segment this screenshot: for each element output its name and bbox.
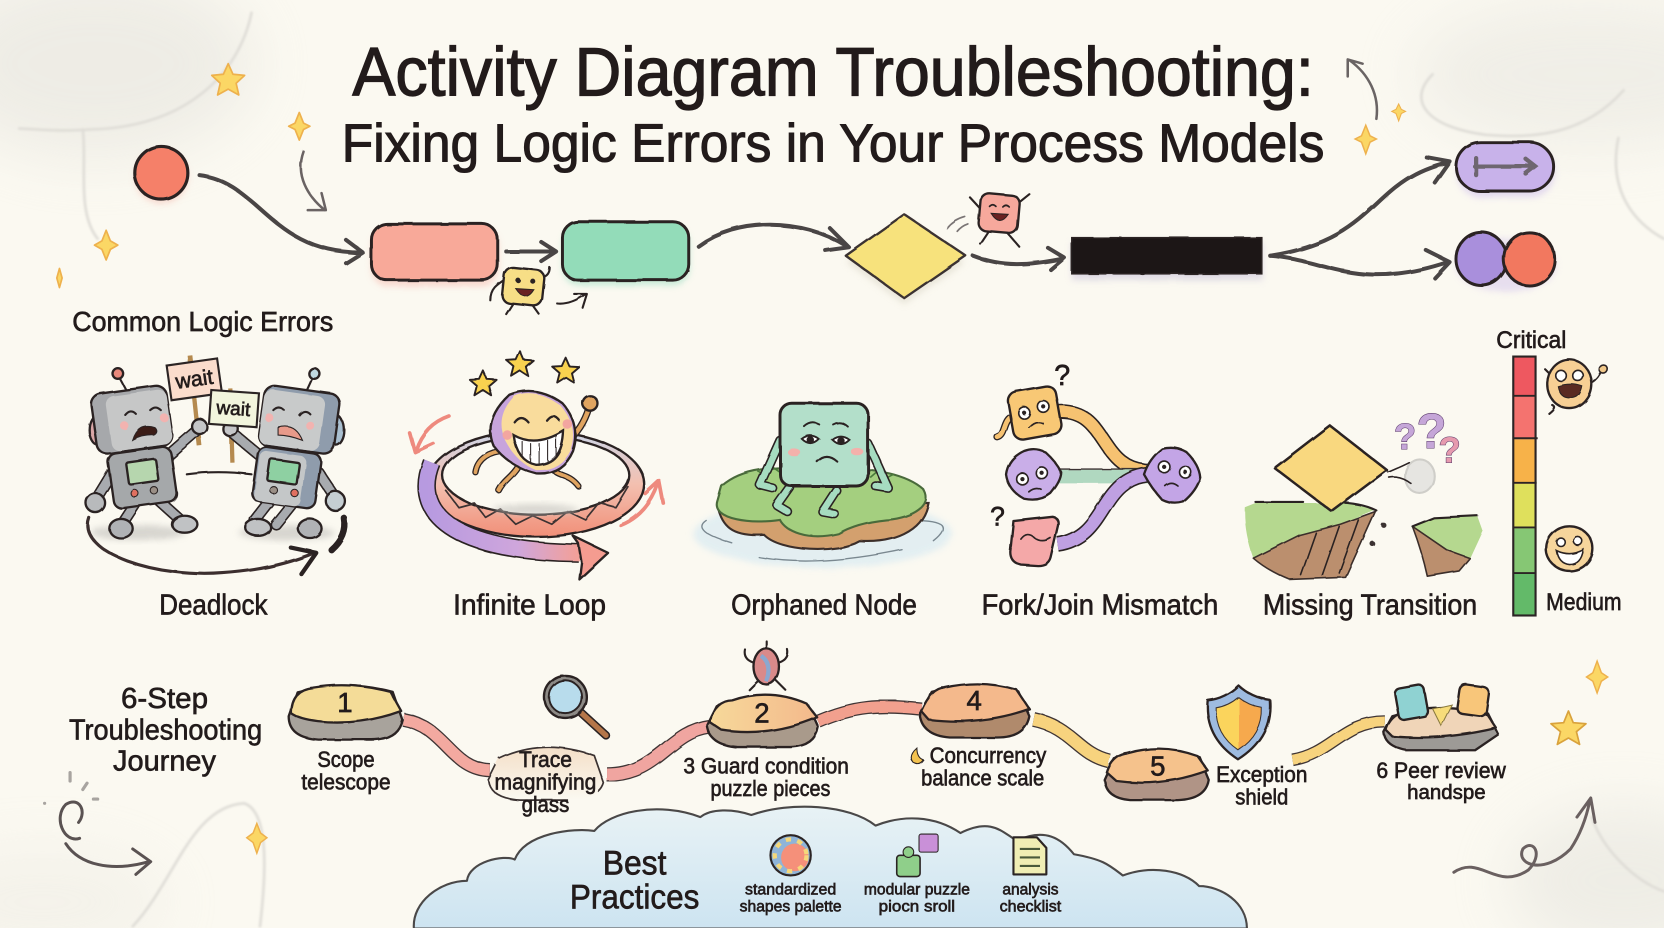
spiral arrow	[427, 463, 608, 579]
caption: trace magnifying glass	[495, 747, 596, 817]
signs: wait	[167, 358, 259, 427]
character: purple node	[1006, 449, 1061, 500]
activity end stadium	[1456, 142, 1555, 197]
character: pink block jumping	[947, 193, 1029, 246]
decision diamond	[846, 214, 966, 305]
number 1: 1	[337, 687, 353, 718]
illustration: infinite loop	[410, 351, 663, 579]
cloud shape	[414, 807, 1247, 928]
caption: concurrency: Concurrency	[930, 743, 1047, 768]
label: critical: Critical	[1496, 327, 1566, 354]
caption: exception shield: Exception	[1216, 762, 1307, 787]
smoke puff	[1388, 459, 1435, 493]
teal branch	[1056, 469, 1152, 476]
question marks	[990, 360, 1070, 531]
label: modular puzzle	[864, 882, 970, 916]
label: medium: Medium	[1546, 589, 1622, 616]
caption: scope telescope	[301, 747, 391, 795]
label: orphaned node: Orphaned Node	[731, 589, 917, 621]
label: modular puzzle: modular puzzle	[864, 882, 970, 899]
action node pink	[371, 224, 499, 287]
character: step jumper	[745, 641, 788, 690]
ribbon: 4 to 5	[1034, 719, 1109, 761]
caption: peer review	[1376, 758, 1507, 804]
sign pole left	[190, 355, 200, 446]
label: infinite loop: Infinite Loop	[453, 589, 606, 621]
caption: trace magnifying glass: magnifying	[495, 770, 596, 795]
purple question marks: ?	[1417, 405, 1446, 459]
stone 4	[920, 684, 1029, 738]
icon: magnifying glass	[544, 676, 606, 735]
characters: peer review handshake	[1394, 684, 1490, 726]
label: analysis checklist	[1000, 882, 1062, 916]
caption: peer review: 6 Peer review	[1376, 758, 1507, 783]
title	[342, 34, 1324, 173]
icon: checklist	[1013, 837, 1046, 874]
red motion arrows	[410, 416, 663, 525]
heading line 2: Troubleshooting	[69, 715, 262, 747]
arrow: action to decision	[698, 225, 849, 250]
severity scale	[1496, 327, 1622, 616]
left cliff	[1245, 502, 1376, 579]
ribbon: trace to 2	[607, 727, 709, 775]
bottom left doodles	[45, 773, 267, 874]
robot right	[223, 368, 345, 538]
stone trace	[488, 747, 604, 800]
arrow: decision to fork	[973, 248, 1064, 270]
heading: best practices	[570, 844, 699, 916]
label: analysis checklist: checklist	[1000, 899, 1062, 916]
panel: best practices cloud	[414, 807, 1247, 928]
step stones	[289, 641, 1498, 800]
stone 1	[289, 685, 402, 740]
number 2: 2	[754, 698, 770, 729]
track ring	[428, 431, 644, 537]
stone 5	[1105, 749, 1209, 800]
title line 1: Activity Diagram Troubleshooting:	[352, 34, 1314, 111]
number 4: 4	[967, 685, 982, 716]
label: standardized shapes palette: standardized	[745, 882, 836, 899]
arrow: start to action	[200, 175, 363, 263]
title line 2: Fixing Logic Errors in Your Process Models	[342, 113, 1324, 173]
character: yellow block	[490, 267, 550, 314]
stone 2	[707, 695, 818, 747]
purple question marks: ?	[1394, 416, 1416, 457]
journey path ribbons	[403, 707, 1385, 775]
character: sad green node	[760, 403, 888, 514]
caption: trace magnifying glass: glass	[522, 792, 569, 817]
flow end circles	[1456, 232, 1556, 292]
label: standardized shapes palette	[740, 882, 842, 916]
illustration: fork join mismatch	[998, 385, 1200, 566]
label: fork join mismatch: Fork/Join Mismatch	[982, 589, 1218, 621]
character: pink node	[1010, 517, 1058, 566]
caption: exception shield: shield	[1235, 784, 1288, 809]
caption: concurrency: balance scale	[921, 765, 1044, 790]
caption: scope telescope: Scope	[317, 747, 375, 772]
caption: trace magnifying glass: Trace	[519, 747, 572, 772]
illustration: missing transition	[1245, 426, 1483, 579]
heading: common logic errors: Common Logic Errors	[72, 306, 333, 337]
character: critical face	[1545, 360, 1608, 414]
icon: shield	[1207, 686, 1271, 760]
action node green	[562, 222, 690, 285]
arrow: fork to flow end	[1270, 250, 1450, 278]
label: deadlock: Deadlock	[159, 589, 268, 621]
bottom right doodles	[1454, 661, 1608, 877]
circular deadlock arrow	[88, 472, 344, 574]
falling pebbles	[1372, 525, 1384, 543]
caption: scope telescope: telescope	[301, 770, 391, 795]
robot left	[86, 368, 207, 538]
arrow: fork to activity end	[1270, 157, 1450, 256]
heading: 6-step journey	[69, 683, 262, 777]
purple question marks: ?	[1439, 430, 1461, 471]
right cliff	[1412, 516, 1483, 576]
arrow: action to action	[506, 242, 556, 261]
heading: best practices: Best	[603, 844, 667, 882]
purple question marks	[1394, 405, 1461, 471]
small arrow: hint	[301, 152, 326, 210]
ribbon: 1 to trace	[403, 719, 490, 770]
heading line 1: 6-Step	[121, 683, 208, 715]
label: modular puzzle: piocn sroll	[879, 899, 955, 916]
caption: concurrency	[921, 743, 1047, 790]
island	[717, 467, 929, 549]
caption: exception shield	[1216, 762, 1307, 809]
caption: guard condition	[683, 754, 849, 801]
decorative arrows and stars top right	[1348, 59, 1406, 154]
sign: wait pale: wait	[215, 398, 252, 421]
stone 6	[1384, 708, 1498, 750]
caption: guard condition: 3 Guard condition	[683, 754, 849, 779]
error labels	[159, 589, 1477, 621]
severity bar	[1513, 357, 1538, 615]
character: medium face	[1546, 526, 1593, 571]
illustration: deadlock robots	[86, 355, 345, 574]
question marks: ?	[1054, 360, 1070, 392]
heading line 3: Journey	[113, 745, 217, 777]
water	[693, 500, 952, 568]
label: standardized shapes palette: shapes palette	[740, 899, 842, 916]
question marks: ?	[990, 501, 1005, 531]
activity flow diagram	[135, 142, 1556, 314]
character: orange node	[998, 385, 1063, 441]
caption: guard condition: puzzle pieces	[710, 776, 830, 801]
sign: wait pink: wait	[173, 366, 215, 394]
step captions	[301, 743, 1507, 817]
decorative stars top left	[57, 64, 310, 288]
ribbon: 5 to 6	[1293, 722, 1385, 760]
character: dizzy runner	[475, 391, 597, 490]
illustration: orphaned node	[693, 403, 952, 568]
sign pole right	[230, 388, 232, 463]
orange branch	[1058, 412, 1151, 471]
start node	[135, 146, 188, 204]
floating decision diamond	[1275, 426, 1387, 511]
small flame icon	[911, 748, 923, 764]
caption: peer review: handspe	[1407, 782, 1486, 804]
label: missing transition: Missing Transition	[1263, 589, 1477, 621]
icon: shapes palette	[770, 835, 811, 875]
number 5: 5	[1150, 751, 1165, 782]
character: join node	[1144, 448, 1200, 503]
step numbers	[337, 685, 1165, 782]
purple branch	[1058, 474, 1151, 544]
ribbon: 2 to 4	[818, 707, 921, 722]
icon: modular puzzle	[897, 834, 938, 877]
heading: best practices: Practices	[570, 878, 699, 916]
dizzy stars	[469, 351, 579, 395]
label: analysis checklist: analysis	[1002, 882, 1059, 899]
fork bar	[1072, 238, 1263, 280]
small arrow: yellow block motion	[557, 294, 587, 308]
